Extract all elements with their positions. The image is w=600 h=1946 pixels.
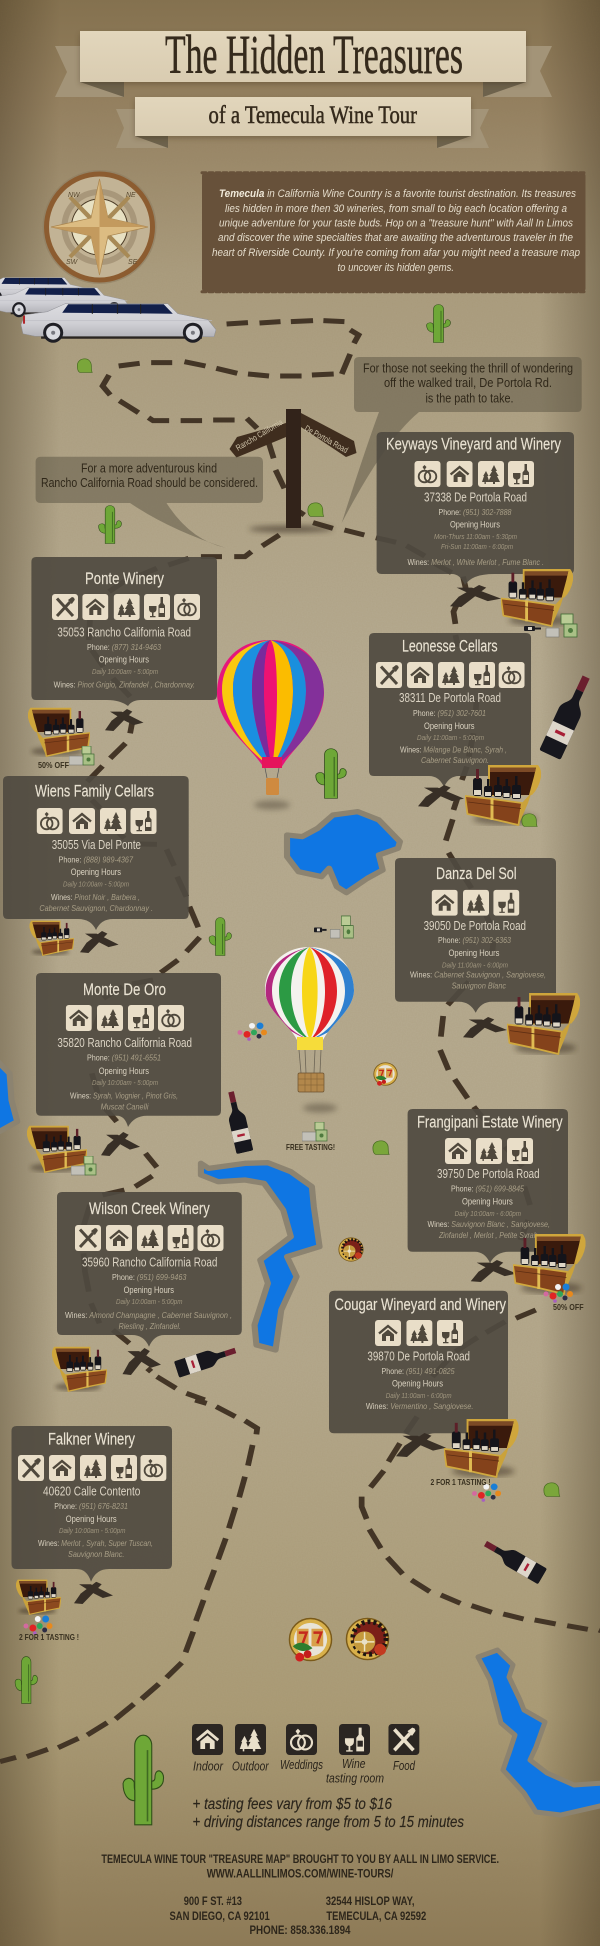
panel background [369, 633, 531, 787]
callout: Rancho California Road [36, 457, 263, 548]
notes: fees and distances [192, 1796, 464, 1831]
feature icons [52, 594, 200, 620]
balloon: rainbow [215, 638, 327, 810]
panel: Cougar Wineyard and Winery [329, 1291, 508, 1443]
winery name: Ponte Winery [85, 569, 164, 588]
winery details [428, 1166, 550, 1240]
panel: Wilson Creek Winery [57, 1192, 242, 1347]
callout: De Portola Rd [342, 357, 582, 523]
winery details: Opening Hours [71, 867, 121, 877]
callout: Rancho California Road: Rancho California Road should be considered. [41, 475, 258, 490]
winery details: Sauvignon Blanc. [68, 1549, 124, 1559]
feature icons [445, 1138, 533, 1164]
winery details: Wines: Merlot , Syrah, Super Tuscan, [38, 1538, 153, 1548]
subtitle text: of a Temecula Wine Tour [208, 102, 418, 129]
winery details [38, 1484, 153, 1559]
winery details: 37338 De Portola Road [424, 490, 527, 505]
treasure chests [16, 569, 586, 1614]
footer: credits and addresses: TEMECULA WINE TOUR "TREASURE MAP" BROUGHT TO YOU BY AALL IN LIMO SERVICE. [101, 1854, 499, 1866]
feature icons [75, 1225, 224, 1251]
panel: Ponte Winery [31, 557, 217, 706]
feature icons [414, 461, 534, 487]
footer: credits and addresses: PHONE: 858.336.1894 [250, 1925, 351, 1937]
winery details [65, 1255, 232, 1331]
sign arm: Rancho California: Rancho California [234, 417, 285, 453]
balloon: white striped [263, 945, 356, 1112]
footer: credits and addresses: 900 F ST. #13 [184, 1896, 242, 1908]
winery name: Danza Del Sol [436, 864, 517, 883]
winery details: Phone: (951) 302-7601 [413, 708, 486, 718]
sign arm: De Portola Road: De Portola Road [303, 423, 350, 455]
legend labels: Outdoor [232, 1759, 269, 1774]
winery details: Opening Hours [450, 520, 500, 530]
feature icons [375, 1320, 463, 1346]
feature icons [376, 662, 525, 688]
callout: Rancho California Road: For a more adventurous kind [81, 461, 217, 476]
winery details: 35055 Via Del Ponte [52, 837, 141, 852]
winery details: Wines: Sauvignon Blanc , Sangiovese, [428, 1219, 550, 1229]
winery details: Wines: Merlot , White Merlot , Fume Blanc . [408, 557, 544, 567]
icon: compass rose: NW [68, 192, 81, 199]
feature icons [66, 1005, 184, 1031]
winery details: Phone: (951) 676-8231 [54, 1501, 128, 1511]
header: title ribbons [55, 24, 552, 148]
winery details: Phone: (951) 302-6363 [438, 935, 511, 945]
trail: dashed treasure route [0, 321, 600, 1762]
winery details: Daily 10:00am - 6:00pm [455, 1209, 521, 1218]
panel: Falkner Winery [12, 1426, 172, 1582]
winery details: 39750 De Portola Road [437, 1166, 540, 1181]
panel: Monte De Oro [36, 973, 221, 1127]
winery details: Opening Hours [424, 721, 475, 731]
loose treasures: bottles, money, jewels, casino tokens [174, 672, 597, 1662]
cacti and bushes [15, 304, 560, 1825]
icon: compass rose: NE [126, 192, 136, 199]
winery details [54, 625, 195, 690]
winery details: Daily 10:00am - 5:00pm [59, 1526, 126, 1535]
winery details: 35960 Rancho California Road [82, 1255, 217, 1270]
chest badges: 50% OFF [38, 760, 69, 770]
label: free tasting: FREE TASTING! [286, 1142, 335, 1152]
winery details: Phone: (951) 699-8845 [451, 1184, 524, 1194]
notes: fees and distances: + driving distances range from 5 to 15 minutes [192, 1814, 464, 1831]
panel background [329, 1291, 508, 1443]
chest badges [19, 760, 584, 1642]
panel: Frangipani Estate Winery [408, 1109, 568, 1263]
panel: Keyways Vineyard and Winery [377, 432, 574, 585]
winery details: 35053 Rancho California Road [57, 625, 191, 640]
feature icons [432, 890, 519, 916]
winery details: Daily 10:00am - 5:00pm [92, 1078, 158, 1087]
winery details: Wines: Pinot Noir , Barbera , [51, 892, 140, 902]
footer: credits and addresses: SAN DIEGO, CA 92101 [170, 1911, 270, 1923]
panel background [57, 1192, 242, 1347]
footer: credits and addresses: 32544 HISLOP WAY, [326, 1896, 414, 1908]
winery details: Phone: (951) 491-0825 [382, 1366, 455, 1376]
legend labels: Wine [342, 1756, 366, 1771]
winery details [39, 837, 153, 913]
legend labels [193, 1756, 416, 1786]
winery details: Opening Hours [462, 1197, 513, 1207]
winery details: Cabernet Sauvignon, Chardonnay . [39, 903, 153, 913]
legend labels: tasting room [326, 1771, 384, 1786]
icon: compass rose: SW [66, 259, 79, 266]
winery details: Zinfandel , Merlot , Petite Syrah. [438, 1230, 540, 1240]
winery name: Cougar Wineyard and Winery [334, 1295, 506, 1314]
winery details: Phone: (951) 699-9463 [112, 1272, 187, 1282]
panel background [36, 973, 221, 1127]
winery details: Daily 10:00am - 5:00pm [63, 880, 129, 889]
winery details [410, 918, 546, 991]
winery details: Phone: (951) 491-6551 [87, 1053, 161, 1063]
winery details: Opening Hours [99, 655, 149, 665]
footer: credits and addresses [101, 1854, 499, 1937]
feature icons [37, 808, 157, 834]
winery details [399, 690, 507, 765]
winery details: Wines: Vermentino , Sangiovese. [366, 1401, 473, 1411]
notes: fees and distances: + tasting fees vary from $5 to $16 [192, 1796, 392, 1813]
panel background [377, 432, 574, 585]
winery details: 38311 De Portola Road [399, 690, 501, 705]
intro paragraph [212, 188, 580, 274]
legend labels: Weddings [280, 1757, 323, 1772]
feature icons [18, 1455, 166, 1481]
winery details: Phone: (888) 989-4367 [58, 855, 133, 865]
water: lakes and rivers [0, 812, 600, 1815]
intro paragraph: to uncover its hidden gems. [338, 262, 454, 274]
ribbon: subtitle band [116, 97, 489, 148]
winery name: Leonesse Cellars [402, 637, 498, 656]
winery details: Fri-Sun 11:00am - 6:00pm [441, 542, 513, 551]
winery details: Daily 11:00am - 5:00pm [417, 733, 484, 742]
winery details: Opening Hours [448, 948, 500, 958]
winery details: 35820 Rancho California Road [57, 1035, 192, 1050]
panel background [3, 776, 189, 930]
legend icons [192, 1724, 419, 1755]
winery name: Wiens Family Cellars [35, 782, 154, 801]
legend: feature icons [192, 1724, 419, 1786]
winery name: Falkner Winery [48, 1429, 135, 1448]
winery name: Wilson Creek Winery [89, 1199, 210, 1218]
winery details: 39050 De Portola Road [424, 918, 526, 933]
winery details: Daily 11:00am - 6:00pm [442, 961, 508, 970]
panel: Wiens Family Cellars [3, 776, 189, 930]
winery details: Wines: Pinot Grigio, Zinfandel , Chardonnay. [54, 680, 195, 690]
X marks on the trail [74, 585, 517, 1604]
legend labels: Food [393, 1758, 416, 1773]
winery details: Mon-Thurs 11:00am - 5:30pm [434, 532, 517, 541]
winery details [366, 1349, 473, 1411]
winery details [57, 1035, 192, 1112]
winery details: Riesling , Zinfandel. [119, 1321, 181, 1331]
panel background [395, 858, 556, 1013]
winery details: 39870 De Portola Road [367, 1349, 470, 1364]
chest badges: 50% OFF [553, 1302, 584, 1312]
ribbon: main title band [55, 31, 552, 97]
chest badges: 2 FOR 1 TASTING ! [430, 1477, 491, 1487]
winery details: Daily 10:00am - 5:00pm [116, 1297, 182, 1306]
panel: intro text [202, 173, 586, 292]
intro paragraph: lies hidden in more then 30 wineries, from small to big each location offering a [225, 203, 567, 215]
icon: limousines [0, 278, 216, 343]
winery details: Cabernet Sauvignon. [421, 755, 489, 765]
winery details: Wines: Almond Champagne , Cabernet Sauvignon , [65, 1310, 232, 1320]
winery details: Phone: (951) 302-7888 [438, 507, 512, 517]
footer: credits and addresses: WWW.AALLINLIMOS.COM/WINE-TOURS/ [207, 1869, 394, 1881]
winery details: Wines: Mélange De Blanc, Syrah , [400, 745, 507, 755]
footer: credits and addresses: TEMECULA, CA 92592 [326, 1911, 426, 1923]
winery details: Phone: (877) 314-9463 [87, 642, 161, 652]
panel: Danza Del Sol [395, 858, 556, 1013]
chest badges: 2 FOR 1 TASTING ! [19, 1632, 79, 1642]
winery details: Opening Hours [99, 1066, 149, 1076]
panel background [408, 1109, 568, 1263]
winery details: Daily 11:00am - 6:00pm [386, 1391, 452, 1400]
winery details: Daily 10:00am - 5:00pm [92, 667, 158, 676]
signpost [230, 409, 356, 532]
winery name: Monte De Oro [83, 980, 166, 999]
callout: De Portola Rd: is the path to take. [426, 391, 514, 406]
winery details: 40620 Calle Contento [43, 1484, 140, 1499]
winery details: Opening Hours [66, 1514, 117, 1524]
winery details: Wines: Syrah, Viognier , Pinot Gris, [70, 1091, 178, 1101]
winery details: Sauvignon Blanc [452, 981, 507, 991]
winery details: Wines: Cabernet Sauvignon , Sangiovese, [410, 970, 546, 980]
callout: De Portola Rd: off the walked trail, De Portola Rd. [384, 375, 552, 390]
panel background [12, 1426, 172, 1582]
winery details: Opening Hours [392, 1379, 443, 1389]
winery details [408, 490, 544, 567]
winery details: Muscat Canelli [101, 1102, 149, 1112]
icon: compass rose: SE [128, 259, 138, 266]
legend labels: Indoor [193, 1759, 224, 1774]
winery details: Opening Hours [124, 1285, 174, 1295]
chest extras: bush, money and jewels [23, 614, 577, 1635]
intro paragraph: Temecula in California Wine Country is a favorite tourist destination. Its treasures [219, 188, 576, 200]
icon: compass rose [42, 170, 156, 284]
panel: Leonesse Cellars [369, 633, 531, 787]
panel background [31, 557, 217, 706]
